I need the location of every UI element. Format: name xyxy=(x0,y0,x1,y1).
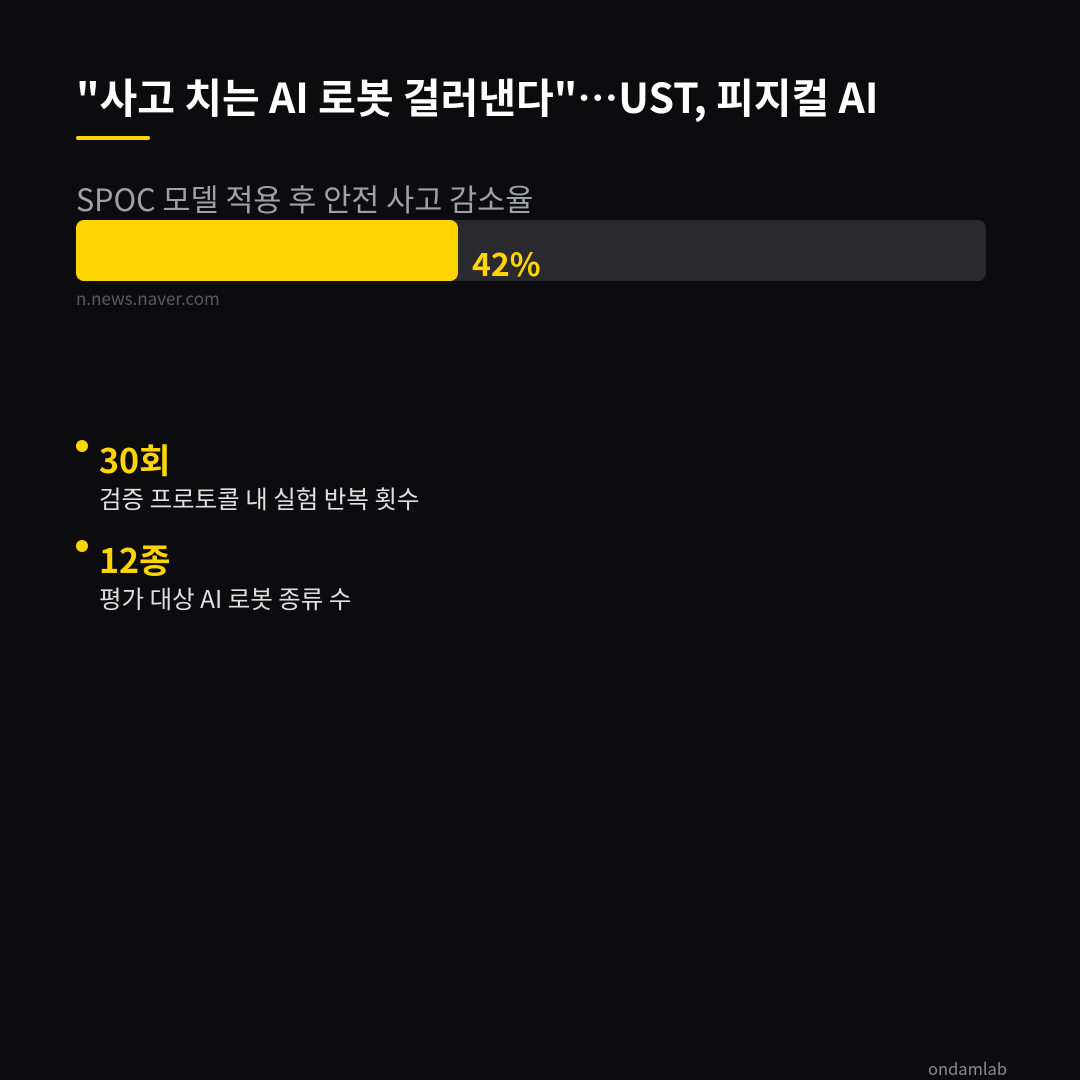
stat 2 xyxy=(76,534,351,616)
bar label: SPOC 모델 적용 후 안전 사고 감소율 xyxy=(76,176,533,220)
bar fill xyxy=(76,220,458,281)
stat 1: 30회 xyxy=(99,434,170,483)
bar value: 42% xyxy=(472,240,541,286)
footer brand: ondamlab xyxy=(928,1056,1007,1080)
bar chart xyxy=(76,220,986,281)
stat 1 xyxy=(76,434,419,516)
title underline accent xyxy=(76,136,150,140)
title: "사고 치는 AI 로봇 걸러낸다"…UST, 피지컬 AI xyxy=(76,65,878,125)
source: n.news.naver.com xyxy=(76,285,220,310)
stat 2: 평가 대상 AI 로봇 종류 수 xyxy=(99,581,351,616)
stat 1: 검증 프로토콜 내 실험 반복 횟수 xyxy=(99,481,419,516)
stat 2: 12종 xyxy=(99,534,170,583)
